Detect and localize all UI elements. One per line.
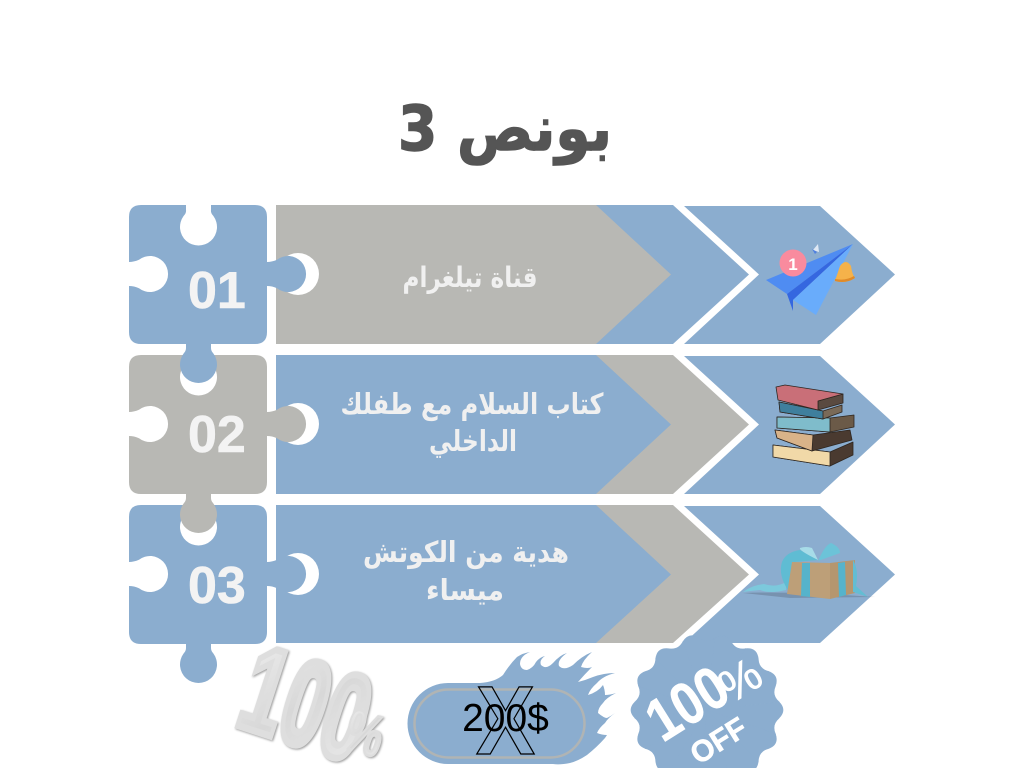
- icon: stack of books: [773, 385, 854, 466]
- row 2 text: كتاب السلام مع طفلك: [340, 387, 604, 421]
- puzzle piece 03: 03: [188, 557, 246, 615]
- badge: 100% off: 100: [634, 653, 741, 754]
- puzzle piece 03: [129, 505, 306, 683]
- row 3 text: هدية من الكوتش: [363, 535, 569, 569]
- badge: 100% decorative 3D text: %: [337, 696, 393, 768]
- badge: 100% off: %: [709, 647, 771, 713]
- row 2 text: الداخلي: [429, 424, 517, 458]
- icon: gift box: [743, 543, 875, 599]
- panel: row 3 arrow: [276, 505, 895, 643]
- badge: 100% off: [628, 631, 786, 768]
- panel: row 1 arrow: [276, 205, 895, 344]
- icon: paper plane with bell: [766, 244, 855, 315]
- price pill with flames: [408, 652, 616, 768]
- row 3 text: [363, 535, 569, 607]
- puzzle piece 01: 01: [188, 262, 246, 320]
- icon: paper plane with bell: 1: [788, 255, 798, 274]
- puzzle piece 02: [129, 355, 306, 533]
- row 3 text: ميساء: [426, 573, 504, 607]
- puzzle piece 02: 02: [188, 406, 246, 464]
- panel: row 2 arrow: [276, 355, 895, 494]
- title: بونص 3: [398, 92, 612, 166]
- puzzle piece 01: [129, 205, 306, 383]
- row 2 text: [340, 387, 604, 458]
- row 1 text: قناة تيلغرام: [402, 261, 538, 294]
- old price: 200$: [462, 697, 549, 740]
